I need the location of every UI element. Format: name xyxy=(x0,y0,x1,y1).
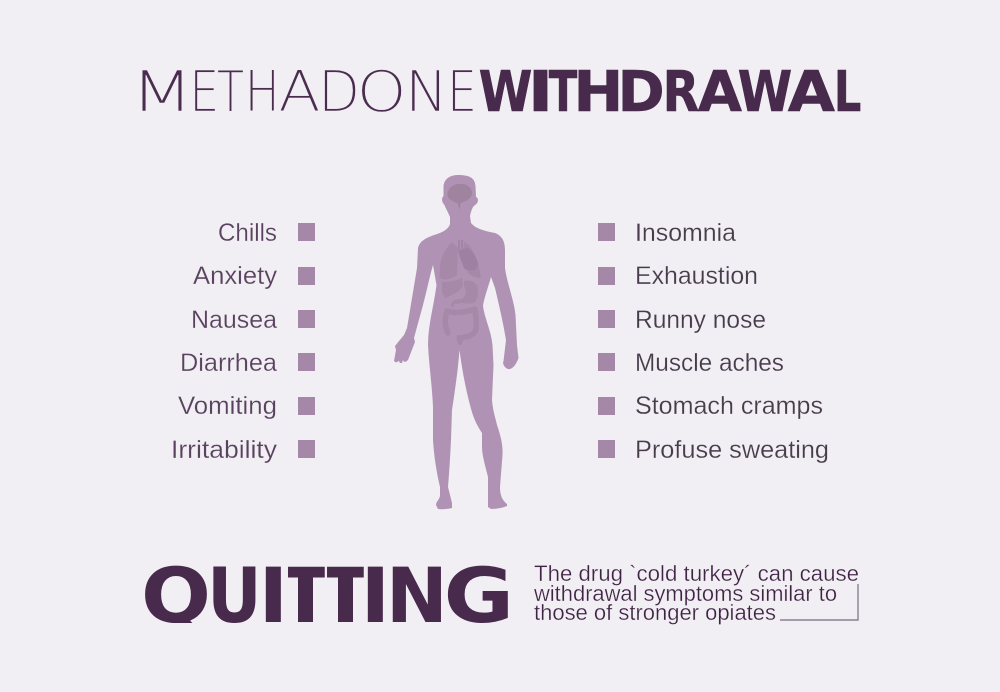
quitting word: N xyxy=(386,551,448,640)
bottom heading xyxy=(145,566,508,623)
organ: brain xyxy=(448,184,472,209)
organ: stomach xyxy=(451,281,478,308)
title: thin word: D xyxy=(318,60,360,125)
title: thin word: E xyxy=(189,60,219,125)
caption line 2: withdrawal symptoms similar to xyxy=(533,581,837,606)
quitting word: Q xyxy=(141,551,211,640)
symptom: Muscle aches: Muscle aches xyxy=(635,349,784,377)
symptom: Nausea: Nausea xyxy=(191,306,277,334)
organ: rectum xyxy=(456,335,464,345)
symptom: Anxiety: Anxiety xyxy=(193,262,278,290)
quitting word: T xyxy=(288,551,325,640)
caption bracket xyxy=(780,584,858,620)
title: bold word: A xyxy=(698,60,743,125)
title: thin word: H xyxy=(245,60,280,125)
symptom: Profuse sweating: Profuse sweating xyxy=(635,436,829,464)
human body figure xyxy=(394,175,518,509)
title: thin word: A xyxy=(278,60,320,125)
organ: heart xyxy=(458,248,478,270)
symptom: Irritability: Irritability xyxy=(171,436,278,464)
organ: liver xyxy=(442,278,463,298)
body silhouette xyxy=(394,175,518,509)
title xyxy=(130,60,861,125)
title: bold word: R xyxy=(663,60,699,125)
symptom: Irritability xyxy=(171,436,315,464)
organ: right lung xyxy=(463,242,481,278)
infographic canvas xyxy=(142,70,860,624)
title: bold word: T xyxy=(549,60,577,125)
symptom: Chills: Chills xyxy=(218,219,277,247)
title: thin word: O xyxy=(357,60,407,125)
title: thin word: M xyxy=(130,60,194,125)
organ: left lung xyxy=(440,242,458,279)
symptom: Anxiety xyxy=(193,262,315,290)
caption line 3: those of stronger opiates xyxy=(534,600,776,625)
T stems thickening xyxy=(298,578,353,622)
symptom list: left xyxy=(171,219,315,464)
symptom: Insomnia: Insomnia xyxy=(635,219,736,247)
title: bold word: D xyxy=(618,60,665,125)
title: bold word: H xyxy=(573,60,623,125)
symptom: Vomiting xyxy=(178,392,315,420)
symptom: Chills xyxy=(218,219,315,247)
title: thin word: E xyxy=(447,60,477,125)
symptom: Stomach cramps: Stomach cramps xyxy=(635,392,823,420)
title: thin word: T xyxy=(217,60,244,125)
symptom: Nausea xyxy=(191,306,315,334)
title: bold word: W xyxy=(479,60,532,125)
quitting word: T xyxy=(327,551,364,640)
quitting word: I xyxy=(360,551,390,640)
quitting word: G xyxy=(444,551,514,640)
organ: intestines xyxy=(445,309,476,337)
title: bold word: I xyxy=(528,60,553,125)
symptom: Diarrhea: Diarrhea xyxy=(180,349,277,377)
caption xyxy=(533,561,859,625)
symptom list: right xyxy=(598,219,829,464)
symptom: Vomiting: Vomiting xyxy=(178,392,277,420)
title: bold word: L xyxy=(834,60,861,125)
caption line 1: The drug `cold turkey´ can cause xyxy=(534,561,859,586)
title: thin word: N xyxy=(405,60,448,125)
title: bold word: W xyxy=(738,60,792,125)
quitting word: U xyxy=(207,551,262,640)
quitting word: I xyxy=(258,551,288,640)
symptom: Exhaustion: Exhaustion xyxy=(635,262,758,290)
title: bold word: A xyxy=(788,60,836,125)
symptom: Runny nose: Runny nose xyxy=(635,306,766,334)
